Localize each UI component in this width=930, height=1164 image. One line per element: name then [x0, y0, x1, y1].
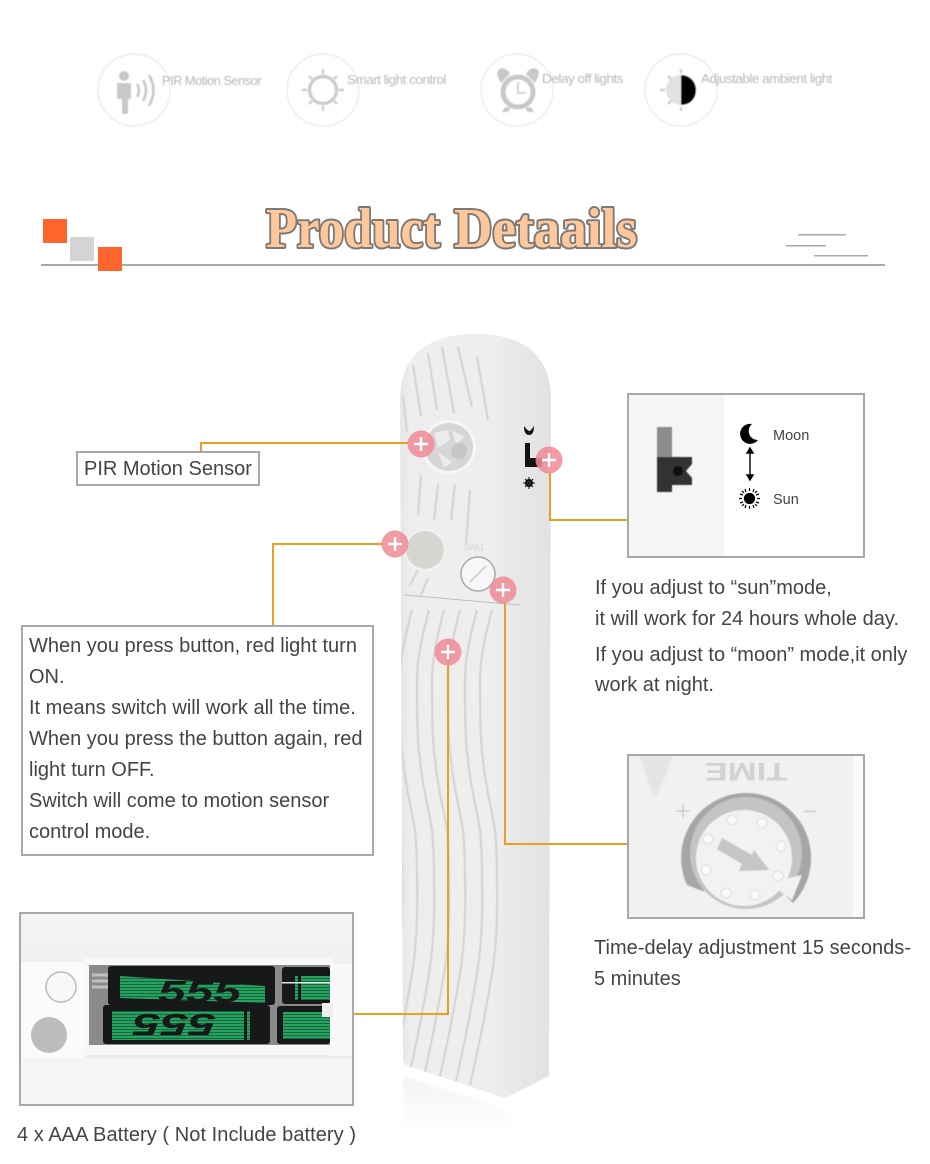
label: PIR Motion Sensor: PIR Motion Sensor [162, 73, 262, 88]
leader: PIR sensor [201, 443, 408, 452]
small dial [46, 972, 76, 1002]
icon: alarm clock [481, 54, 553, 126]
icon: sun [739, 488, 760, 509]
text: sun and moon mode: If you adjust to “moon” mode,it only [595, 644, 907, 666]
icon: moon [740, 424, 758, 444]
battery bottom left: 555 [132, 1007, 216, 1042]
label: Adjustable ambient light: Adjustable ambient light [701, 71, 833, 86]
icon: smart light control [287, 54, 359, 126]
marker: mode switch [536, 446, 562, 474]
leader: push button [273, 544, 383, 626]
leader: battery [354, 665, 448, 1014]
product: reflection [403, 1076, 520, 1130]
title: Detaails [454, 198, 637, 260]
panel: time dial close-up: + [675, 796, 691, 826]
marker: PIR sensor [408, 430, 434, 458]
panel: moon and sun switch [628, 394, 864, 557]
callout: button description [22, 626, 373, 855]
callout: button description: light turn OFF. [29, 759, 155, 781]
decorative dashes [786, 234, 868, 256]
callout: PIR Motion Sensor: PIR Motion Sensor [84, 458, 252, 480]
label: Smart light control: Smart light control [347, 72, 447, 87]
panel: time dial close-up: − [802, 796, 818, 826]
title: Product [266, 198, 440, 260]
time dial: TIME [463, 542, 485, 552]
callout: button description: It means switch will work all the time. [29, 697, 356, 719]
battery top right [282, 967, 330, 1004]
product: motion sensor device [400, 334, 551, 1098]
dial ring [681, 793, 811, 909]
panel: time dial close-up [628, 755, 864, 918]
marker: battery [434, 638, 462, 666]
text: time delay: 5 minutes [594, 968, 681, 990]
dial arrow [717, 838, 769, 871]
title [266, 198, 637, 260]
text: sun and moon mode: work at night. [594, 674, 714, 696]
cover seam [404, 595, 520, 605]
icon: PIR motion sensor [98, 54, 170, 126]
dial dots [701, 815, 786, 900]
panel: battery compartment [20, 913, 353, 1105]
mode switch [523, 426, 542, 489]
spring contact [92, 975, 108, 987]
time dial [461, 542, 495, 591]
text: time delay [594, 937, 911, 990]
marker: push button [382, 530, 408, 558]
callout: button description: Switch will come to motion sensor [29, 790, 329, 812]
callout: PIR Motion Sensor [77, 452, 259, 485]
callout: button description: When you press button, red light turn [29, 635, 357, 657]
push button [404, 529, 446, 571]
text: sun and moon mode: If you adjust to “sun”mode, [595, 577, 832, 599]
battery top left [108, 966, 275, 1009]
text: sun and moon mode [594, 577, 907, 696]
leader: time dial [505, 603, 628, 844]
PIR lens [422, 420, 476, 474]
switch close-up [657, 427, 692, 492]
feature icons row [98, 54, 833, 126]
leader: mode switch [550, 473, 628, 520]
small button [31, 1017, 67, 1053]
label: mirrored TIME: TIME [704, 757, 788, 785]
decorative squares [41, 219, 885, 271]
caption: battery: 4 x AAA Battery ( Not Include battery ) [17, 1124, 356, 1146]
device grooves [401, 346, 498, 1086]
label: Delay off lights: Delay off lights [542, 71, 624, 86]
marker: time dial [490, 576, 516, 604]
icon: double arrow [747, 448, 753, 480]
battery bottom right [277, 1003, 333, 1044]
battery top left: 555 [158, 974, 242, 1009]
callout: button description: control mode. [29, 821, 150, 843]
battery bottom left [103, 1005, 270, 1044]
text: time delay: Time-delay adjustment 15 seconds- [594, 937, 911, 959]
text: sun and moon mode: it will work for 24 hours whole day. [595, 608, 899, 630]
icon: adjustable ambient light [645, 54, 717, 126]
callout: button description: ON. [29, 666, 65, 688]
callout: button description: When you press the button again, red [29, 728, 363, 750]
label: Sun: Sun [773, 492, 799, 508]
label: Moon: Moon [773, 428, 809, 444]
